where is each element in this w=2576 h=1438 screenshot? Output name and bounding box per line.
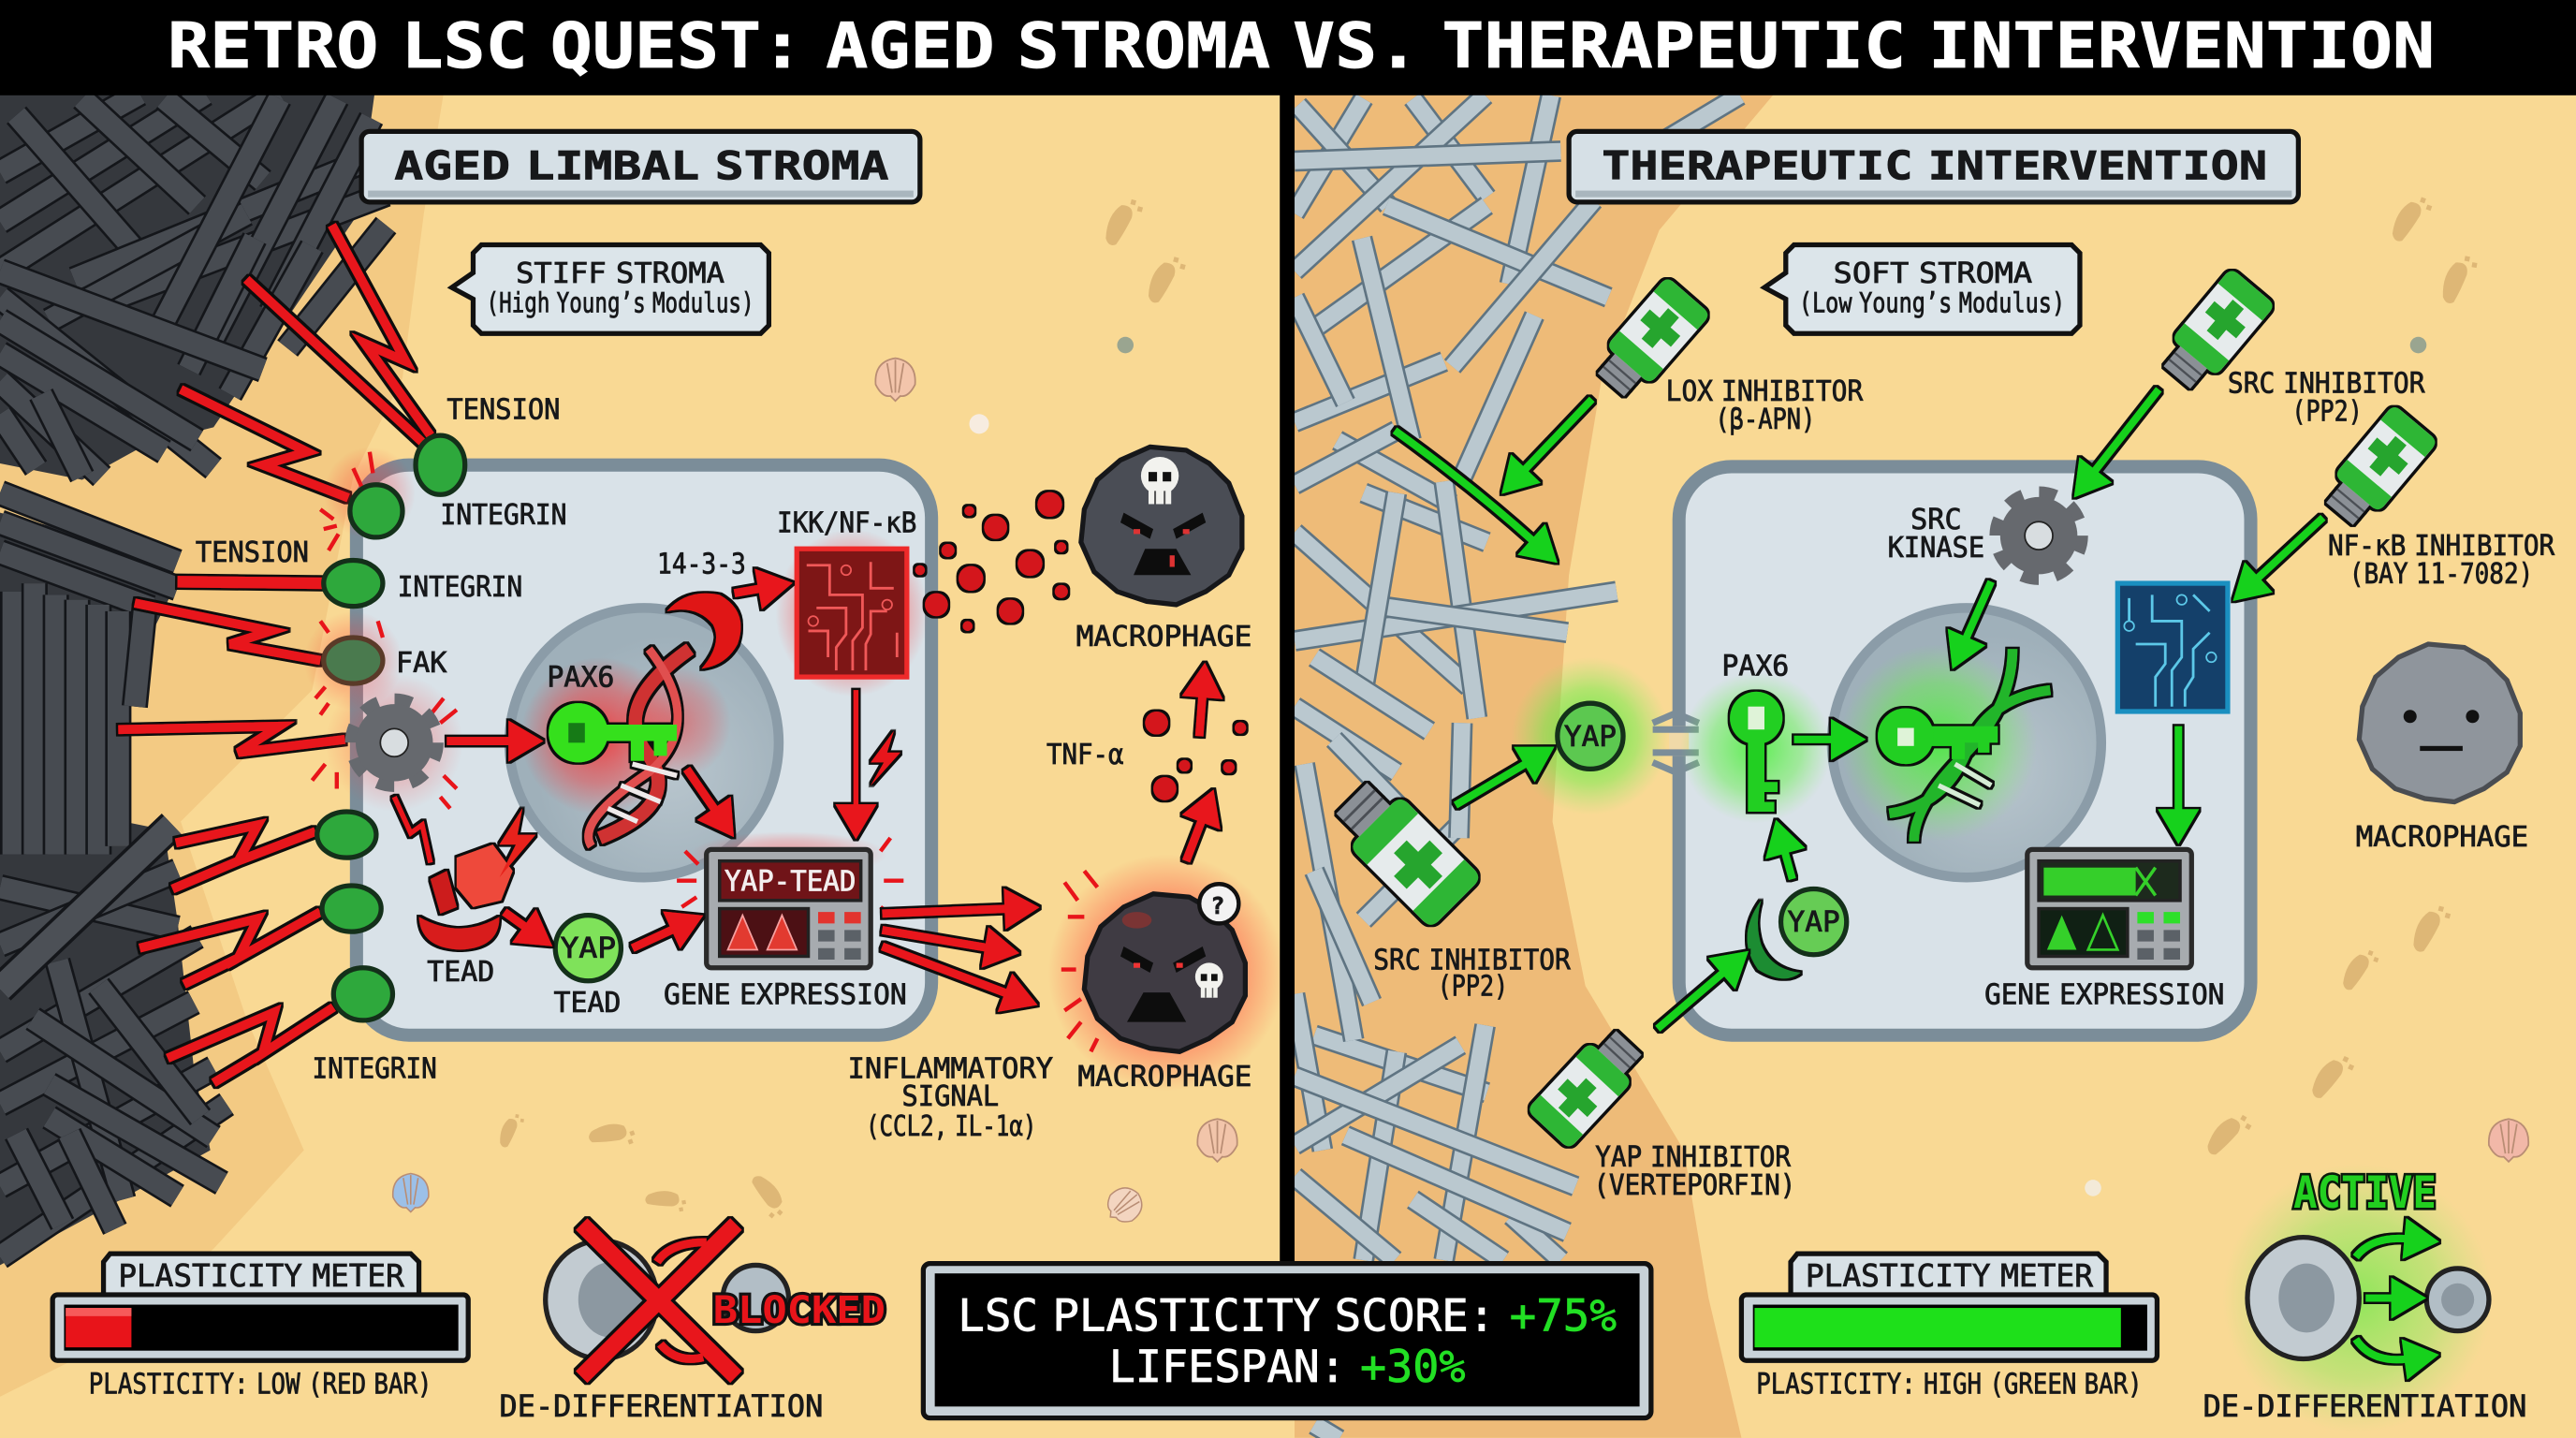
- icon: PAX6 key on red DNA: [520, 649, 731, 846]
- heading: aged limbal stroma: AGED LIMBAL STROMA: [394, 142, 889, 188]
- plasticity meter: high: [1741, 1254, 2157, 1401]
- icon: SRC inhibitor bottle (top): SRC INHIBITOR: [2228, 367, 2425, 400]
- icon: SRC inhibitor bottle (left): (PP2): [1438, 971, 1508, 1004]
- labels: tension, integrin, FAK: INTEGRIN: [398, 571, 522, 604]
- stiff dark collagen fibres: [0, 94, 386, 1265]
- icon: LOX inhibitor bottle: (β-APN): [1715, 404, 1815, 436]
- label: inflammatory signal: SIGNAL: [902, 1080, 999, 1113]
- labels: tension, integrin, FAK: TENSION: [196, 536, 309, 569]
- membrane gate: [1653, 713, 1699, 772]
- icon: IKK/NF-kB circuit chip: [775, 507, 929, 697]
- de-differentiation blocked: [500, 1225, 886, 1424]
- icon: blue circuit chip: [2117, 583, 2228, 712]
- plasticity meter: high: PLASTICITY: HIGH (GREEN BAR): [1756, 1368, 2143, 1401]
- icon: calm macrophage: [2356, 644, 2528, 854]
- label: TNF-alpha: TNF-α: [1046, 739, 1124, 771]
- sand decorations: shells and footprints: [393, 195, 1237, 1230]
- icon: 14-3-3 hook: 14-3-3: [657, 549, 746, 581]
- gene expression console: YAP-TEAD: [664, 831, 907, 1011]
- gene expression console: YAP-TEAD: YAP-TEAD: [724, 865, 856, 898]
- icon: angry macrophage (top): [1076, 447, 1251, 653]
- callout: soft stroma: SOFT STROMA: [1834, 257, 2032, 290]
- cell: aged cell membrane and nucleus: [357, 465, 931, 1035]
- icon: NF-kB inhibitor bottle: (BAY 11-7082): [2349, 558, 2533, 591]
- icon: active YAP with glow: YAP: [1564, 721, 1617, 754]
- plasticity meter: low: PLASTICITY: LOW (RED BAR): [89, 1368, 432, 1401]
- heading: therapeutic intervention: [1569, 131, 2298, 202]
- icon: 14-3-3 hook: [657, 549, 746, 668]
- labels: tension, integrin, FAK: INTEGRIN: [440, 499, 567, 532]
- de-differentiation active: [2203, 1164, 2526, 1432]
- red signal arrows: [394, 588, 1203, 994]
- icon: inflamed macrophage (bottom): ?: [1211, 892, 1224, 919]
- icon: SRC inhibitor bottle (top): (PP2): [2291, 395, 2363, 428]
- score box: LSC PLASTICITY SCORE: +75%: [958, 1291, 1617, 1343]
- labels: tension, integrin, FAK: TENSION: [446, 394, 560, 427]
- callout: stiff stroma: STIFF STROMA: [516, 257, 724, 290]
- de-differentiation blocked: BLOCKED: [713, 1288, 886, 1332]
- icon: SRC kinase gear: SRC: [1910, 504, 1962, 536]
- callout: soft stroma: [1764, 245, 2080, 333]
- label: inflammatory signal: [848, 1052, 1053, 1143]
- labels: tension, integrin, FAK: FAK: [396, 647, 446, 680]
- score box: [923, 1264, 1651, 1418]
- cell: treated cell membrane and nucleus: [1679, 466, 2250, 1035]
- icon: YAP inhibitor bottle: [1527, 1023, 1795, 1202]
- icon: SRC kinase gear: KINASE: [1888, 532, 1984, 565]
- plasticity meter: high: PLASTICITY METER: [1806, 1257, 2094, 1294]
- icon: YAP circle: YAP: [560, 932, 616, 965]
- stress glows and sparks at membrane: [304, 447, 463, 812]
- callout: stiff stroma: (High Young’s Modulus): [487, 286, 754, 318]
- label: inflammatory signal: INFLAMMATORY: [848, 1052, 1053, 1085]
- icon: PAX6 key (vertical): PAX6: [1721, 650, 1789, 682]
- score box: LIFESPAN: +30%: [1109, 1342, 1466, 1393]
- cytokine particles: [915, 492, 1246, 800]
- sand decorations: shells and footprints: [2085, 192, 2528, 1196]
- icon: YAP inhibitor bottle: YAP INHIBITOR: [1595, 1141, 1791, 1174]
- icon: PAX6 key on green DNA: [1840, 644, 2050, 842]
- icon: PAX6 key (vertical): [1680, 650, 1832, 823]
- title banner: [0, 0, 2576, 95]
- icon: inflamed macrophage (bottom): MACROPHAGE: [1077, 1061, 1251, 1093]
- gene expression console: restored: [1984, 849, 2224, 1011]
- panel: aged limbal stroma (left): [0, 94, 1284, 1424]
- de-differentiation active: DE-DIFFERENTIATION: [2203, 1390, 2526, 1424]
- icon: YAP with inhibitor crescent: YAP: [1788, 906, 1840, 939]
- icon: inflamed macrophage (bottom): [1048, 855, 1284, 1093]
- icon: YAP circle: [553, 916, 621, 1020]
- gene expression console: restored: GENE EXPRESSION: [1984, 978, 2224, 1011]
- icon: LOX inhibitor bottle: LOX INHIBITOR: [1666, 375, 1863, 408]
- icon: IKK/NF-kB circuit chip: IKK/NF-κB: [777, 507, 916, 540]
- icon: angry macrophage (top): MACROPHAGE: [1076, 621, 1251, 653]
- labels: tension, integrin, FAK: [196, 394, 567, 1085]
- icon: YAP inhibitor bottle: (VERTEPORFIN): [1593, 1169, 1795, 1202]
- green therapeutic arrows: [1395, 389, 2323, 1029]
- icon: NF-kB inhibitor bottle: NF-κB INHIBITOR: [2328, 530, 2554, 563]
- icon: YAP circle: TEAD: [553, 987, 621, 1020]
- icon: active YAP with glow: [1512, 657, 1669, 815]
- callout: soft stroma: (Low Young’s Modulus): [1799, 286, 2065, 318]
- icon: PAX6 key on red DNA: PAX6: [547, 662, 614, 695]
- icon: YAP with inhibitor crescent: [1747, 889, 1847, 978]
- panel: therapeutic intervention (right): [1295, 95, 2554, 1438]
- icon: SRC inhibitor bottle (top): [2155, 268, 2425, 428]
- labels: tension, integrin, FAK: INTEGRIN: [312, 1052, 437, 1085]
- title banner: RETRO LSC QUEST: AGED STROMA VS. THERAPEUTIC INTERVENTION: [168, 9, 2435, 82]
- icon: TEAD degradation: [419, 809, 535, 989]
- callout: stiff stroma: [452, 245, 768, 333]
- center divider: [1280, 94, 1295, 1265]
- heading: aged limbal stroma: [361, 131, 920, 202]
- label: inflammatory signal: (CCL2, IL-1α): [866, 1110, 1036, 1143]
- plasticity meter: low: [52, 1254, 468, 1401]
- de-differentiation blocked: DE-DIFFERENTIATION: [500, 1390, 823, 1424]
- de-differentiation active: ACTIVE: [2293, 1167, 2437, 1219]
- integrin receptors: [317, 435, 465, 1020]
- icon: FAK gear: [353, 701, 435, 784]
- tension lightning bolts: [118, 225, 431, 1083]
- soft light collagen fibres: [1295, 95, 1740, 1438]
- icon: SRC inhibitor bottle (left): [1326, 772, 1571, 1004]
- icon: SRC kinase gear: [1888, 494, 2080, 577]
- gene expression console: YAP-TEAD: GENE EXPRESSION: [664, 978, 907, 1011]
- icon: LOX inhibitor bottle: [1589, 276, 1863, 436]
- heading: therapeutic intervention: THERAPEUTIC INTERVENTION: [1602, 142, 2267, 188]
- plasticity meter: low: PLASTICITY METER: [118, 1257, 405, 1294]
- icon: SRC inhibitor bottle (left): SRC INHIBITOR: [1373, 945, 1571, 977]
- icon: calm macrophage: MACROPHAGE: [2356, 821, 2528, 854]
- icon: NF-kB inhibitor bottle: [2318, 404, 2554, 591]
- icon: TEAD degradation: TEAD: [427, 956, 494, 989]
